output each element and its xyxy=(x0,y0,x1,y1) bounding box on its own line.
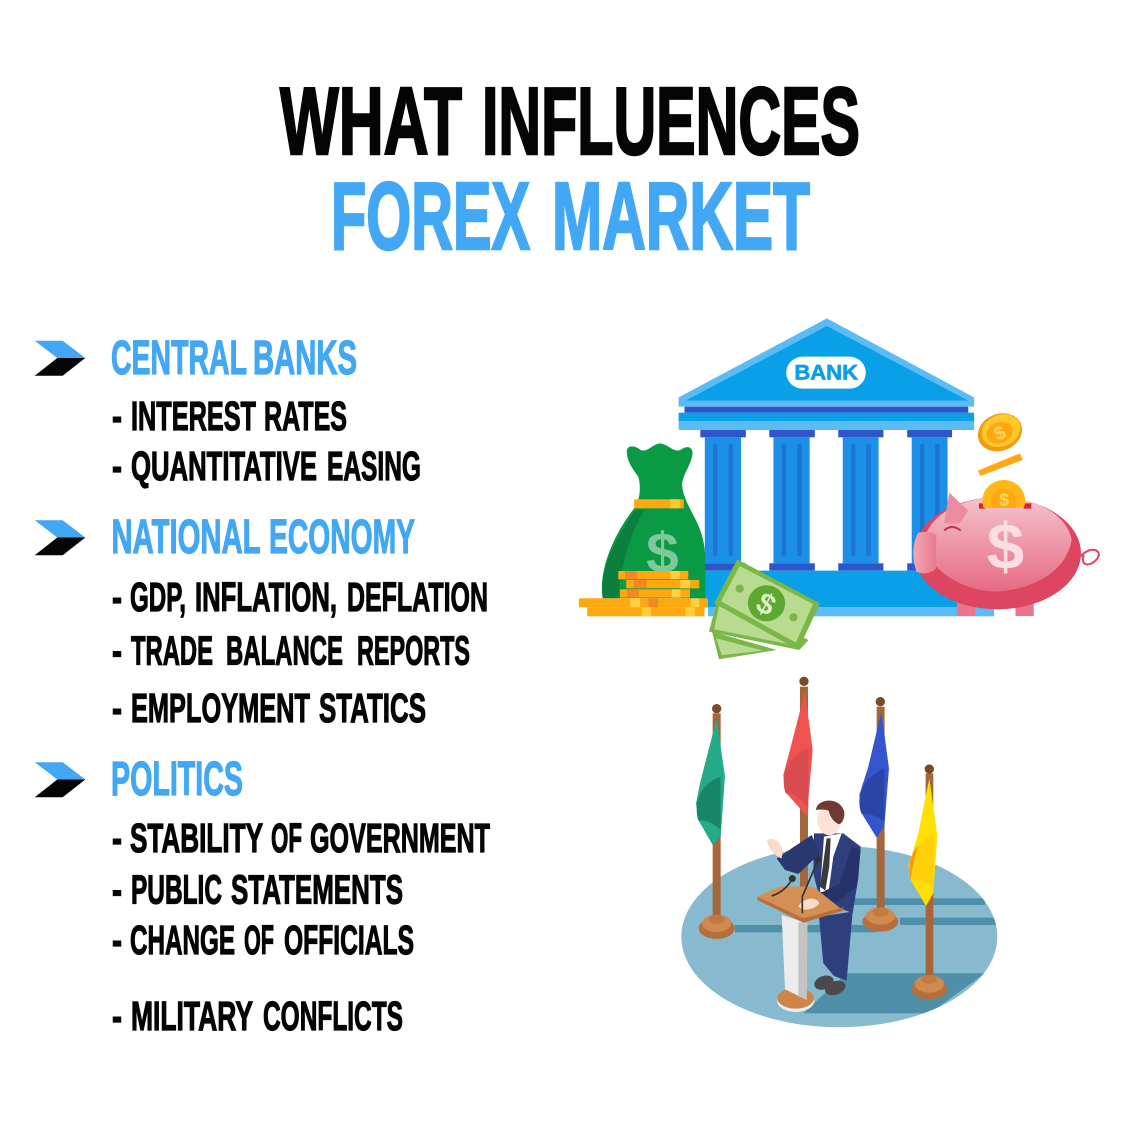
money bag xyxy=(602,443,705,598)
item: gdp: GDP, xyxy=(130,574,186,620)
piggy bank xyxy=(913,480,1099,616)
title line 1 xyxy=(280,68,860,175)
item: military conflicts: - xyxy=(112,993,122,1039)
falling coins xyxy=(971,406,1029,476)
shirt and tie xyxy=(820,833,842,893)
right arm xyxy=(817,847,861,904)
item: quantitative easing: EASING xyxy=(327,443,421,489)
item: trade balance: - xyxy=(112,628,122,674)
head xyxy=(816,801,844,835)
item: quantitative easing: QUANTITATIVE xyxy=(131,443,317,489)
icon: chevron xyxy=(35,762,85,797)
item: public statements: PUBLIC xyxy=(131,866,222,912)
item: stability: STABILITY xyxy=(130,815,263,861)
item: change of officials: OF xyxy=(244,917,274,963)
heading: central banks: CENTRAL xyxy=(111,332,247,385)
floor disc xyxy=(681,846,997,1027)
item: stability: OF xyxy=(271,815,302,861)
item: trade balance: BALANCE xyxy=(226,628,343,674)
title line 1: INFLUENCES xyxy=(482,68,860,175)
item: interest rates: RATES xyxy=(264,393,347,439)
section: central banks xyxy=(35,332,421,489)
jacket xyxy=(813,833,861,913)
green flag xyxy=(696,704,735,939)
bank sign: BANK xyxy=(794,360,858,385)
item: change of officials: OFFICIALS xyxy=(284,917,414,963)
title line 2: FOREX xyxy=(331,163,530,270)
podium xyxy=(757,887,843,1012)
section: politics xyxy=(35,753,490,1039)
heading: national economy: NATIONAL xyxy=(112,511,260,564)
item: military conflicts: CONFLICTS xyxy=(263,993,403,1039)
item: public statements xyxy=(112,866,403,912)
section: national economy xyxy=(35,511,488,731)
item: interest rates: - xyxy=(112,393,122,439)
item: change of officials: CHANGE xyxy=(130,917,235,963)
red flag xyxy=(783,677,813,887)
item: stability: GOVERNMENT xyxy=(310,815,490,861)
speaker xyxy=(757,801,861,1012)
title line 1: WHAT xyxy=(280,68,462,175)
shoes xyxy=(812,973,848,998)
item: employment: STATICS xyxy=(319,685,426,731)
item: trade balance: REPORTS xyxy=(357,628,470,674)
coin entering the slot: $ xyxy=(999,490,1009,509)
item: employment: EMPLOYMENT xyxy=(131,685,310,731)
illustration: politician at podium xyxy=(681,677,997,1027)
coin entering the slot xyxy=(982,480,1025,509)
item: stability xyxy=(112,815,490,861)
money bag: $ xyxy=(646,523,679,585)
piggy bank: $ xyxy=(987,510,1024,583)
title xyxy=(280,68,860,270)
icon: chevron xyxy=(35,341,85,376)
illustration: bank with money xyxy=(579,318,1099,659)
item: gdp xyxy=(112,574,488,620)
title line 2: MARKET xyxy=(552,163,810,270)
icon: chevron xyxy=(35,520,85,555)
falling coins: $ xyxy=(991,422,1010,445)
heading: politics: POLITICS xyxy=(111,753,243,806)
extended arm and hand xyxy=(767,835,820,874)
item: trade balance: TRADE xyxy=(131,628,213,674)
title line 2 xyxy=(331,163,810,270)
gold coin stacks xyxy=(579,571,708,616)
blue flag xyxy=(859,697,898,932)
banknotes xyxy=(709,559,820,659)
item: quantitative easing: - xyxy=(112,443,122,489)
item: public statements: - xyxy=(112,866,122,912)
item: public statements: STATEMENTS xyxy=(231,866,403,912)
item: employment: - xyxy=(112,685,122,731)
item: gdp: INFLATION, xyxy=(195,574,337,620)
item: military conflicts xyxy=(112,993,403,1039)
item: stability: - xyxy=(112,815,122,861)
yellow flag xyxy=(908,764,947,999)
heading: national economy: ECONOMY xyxy=(269,511,415,564)
item: change of officials: - xyxy=(112,917,122,963)
heading: central banks: BANKS xyxy=(253,332,357,385)
item: trade balance xyxy=(112,628,470,674)
item: gdp: - xyxy=(112,574,122,620)
bank sign xyxy=(786,357,866,389)
item: military conflicts: MILITARY xyxy=(131,993,253,1039)
trousers xyxy=(819,912,853,981)
item: change of officials xyxy=(112,917,414,963)
item: gdp: DEFLATION xyxy=(347,574,488,620)
bank building xyxy=(679,318,994,616)
microphones xyxy=(772,857,821,913)
item: interest rates: INTEREST xyxy=(131,393,256,439)
banknotes: $ xyxy=(751,586,782,623)
